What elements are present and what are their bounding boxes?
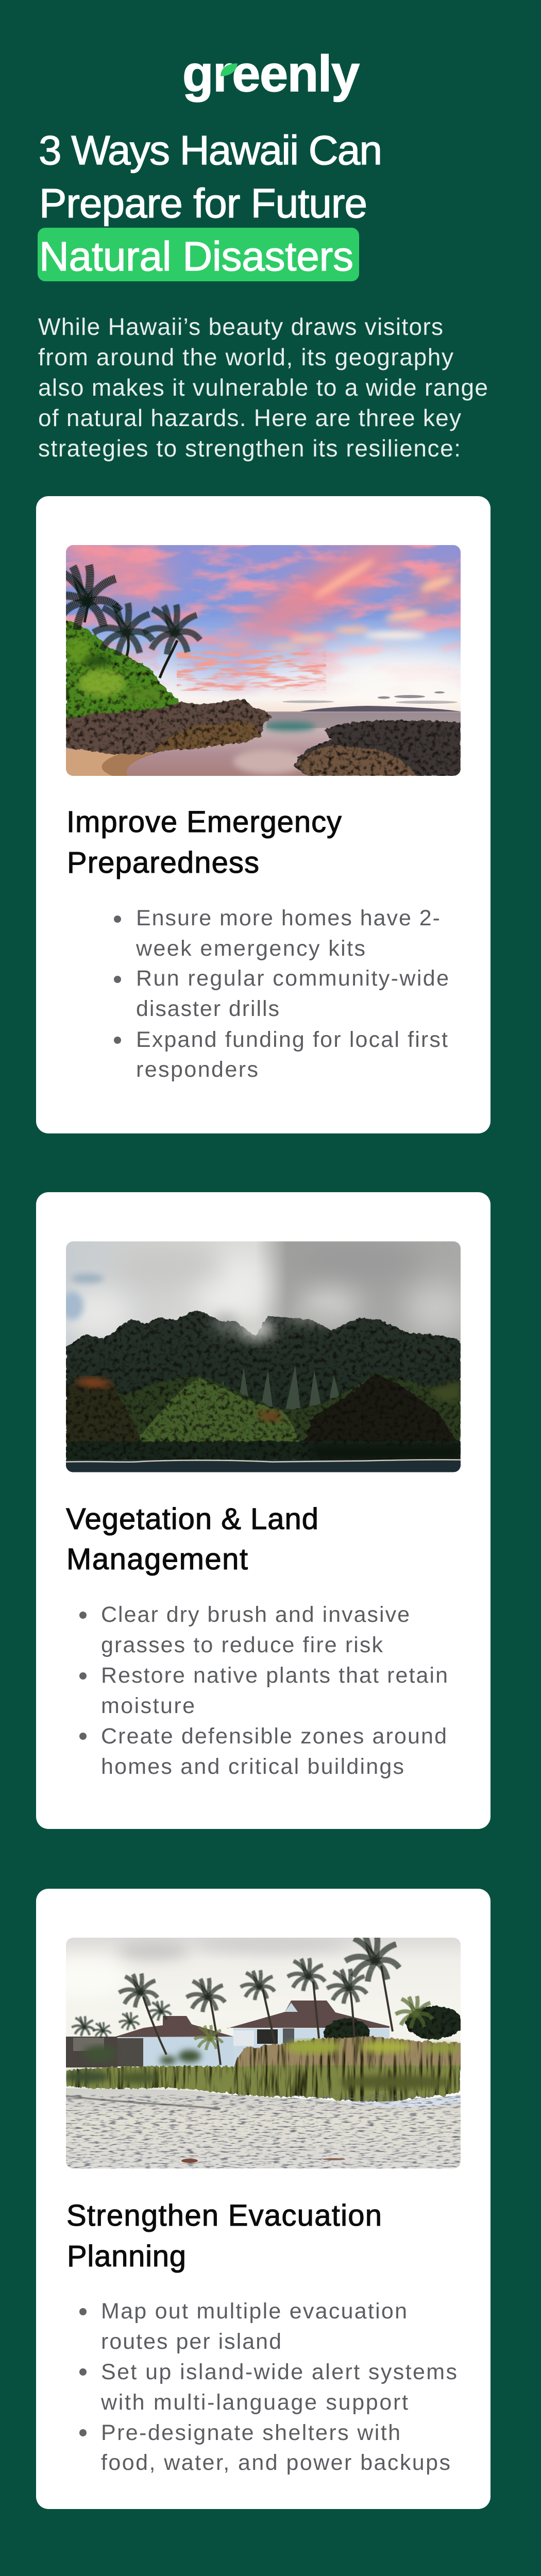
ridge <box>66 1310 461 1472</box>
intro paragraph: from around the world, its geography <box>38 344 453 370</box>
island <box>300 706 461 713</box>
green slopes <box>66 1372 461 1472</box>
bullet list: routes per island <box>101 2329 281 2354</box>
heading <box>66 805 342 879</box>
surf line <box>66 1460 461 1462</box>
intro paragraph <box>38 313 488 462</box>
bullet list: Expand funding for local first <box>136 1027 448 1052</box>
bullet list: with multi-language support <box>100 2390 408 2415</box>
right house <box>233 2028 390 2066</box>
bullet list: Create defensible zones around <box>101 1724 447 1749</box>
bullet list: Run regular community-wide <box>136 966 449 991</box>
shoreline trees <box>66 1442 461 1460</box>
dark building <box>66 2037 117 2067</box>
bullet list: Restore native plants that retain <box>101 1663 448 1688</box>
logo: greenly: greenly <box>182 45 360 102</box>
bullet list: disaster drills <box>136 996 279 1021</box>
heading: Preparedness <box>67 846 259 879</box>
panel: Vegetation & Land Management <box>36 1192 491 1829</box>
heading: Management <box>66 1543 248 1576</box>
bullet list: food, water, and power backups <box>101 2450 450 2475</box>
bullet list <box>79 2299 457 2475</box>
heading: Strengthen Evacuation <box>66 2199 382 2232</box>
bullet list <box>79 1602 448 1779</box>
right dark trees <box>324 2006 463 2047</box>
heading: Improve Emergency <box>66 805 342 839</box>
tall grasses <box>233 2037 461 2079</box>
right rocks <box>294 720 461 776</box>
intro paragraph: also makes it vulnerable to a wide range <box>38 374 488 401</box>
panel: Improve Emergency Preparedness <box>36 496 491 1133</box>
photo: beach houses and palms <box>45 1935 463 2168</box>
heading <box>66 2199 382 2273</box>
bullet list: Clear dry brush and invasive <box>101 1602 410 1627</box>
foliage <box>66 621 179 718</box>
beach sand <box>66 2088 461 2168</box>
title: 3 Ways Hawaii Can <box>39 127 382 173</box>
bullet list: Ensure more homes have 2- <box>136 906 440 930</box>
title: Prepare for Future <box>39 180 367 226</box>
heading: Vegetation & Land <box>66 1502 318 1536</box>
sand <box>66 749 154 776</box>
bullet list: homes and critical buildings <box>101 1754 404 1779</box>
bullet list: grasses to reduce fire risk <box>101 1633 383 1657</box>
photo: sunset beach with palms <box>66 545 461 776</box>
distant clouds <box>282 691 458 704</box>
left house <box>117 2037 233 2066</box>
heading <box>66 1502 318 1576</box>
palm trees <box>160 640 177 678</box>
intro paragraph: While Hawaii’s beauty draws visitors <box>38 313 443 340</box>
bullet list: week emergency kits <box>136 936 365 961</box>
bullet list: Pre-designate shelters with <box>101 2420 400 2445</box>
intro paragraph: strategies to strengthen its resilience: <box>38 435 461 462</box>
bullet list: Set up island-wide alert systems <box>101 2360 457 2384</box>
title highlight <box>38 228 359 281</box>
left rocks <box>66 699 272 754</box>
bullet list: Map out multiple evacuation <box>101 2299 407 2324</box>
water <box>66 1460 461 1472</box>
distant trees <box>72 2001 171 2038</box>
title <box>38 127 382 281</box>
panel: Strengthen Evacuation Planning <box>36 1889 491 2509</box>
palm trees <box>143 1966 393 2065</box>
sea <box>66 711 461 776</box>
intro paragraph: of natural hazards. Here are three key <box>38 404 461 431</box>
title: Natural Disasters <box>39 233 353 279</box>
heading: Planning <box>67 2240 186 2273</box>
ridge spires <box>197 1365 339 1410</box>
icon: leaf on the r <box>221 63 238 76</box>
bullet list: responders <box>136 1057 258 1082</box>
bullet list <box>114 906 449 1082</box>
summit cloud <box>213 1311 344 1340</box>
photo: cloudy green mountains <box>61 1242 468 1472</box>
low dune grass <box>66 2065 461 2102</box>
bullet list: moisture <box>101 1693 195 1718</box>
